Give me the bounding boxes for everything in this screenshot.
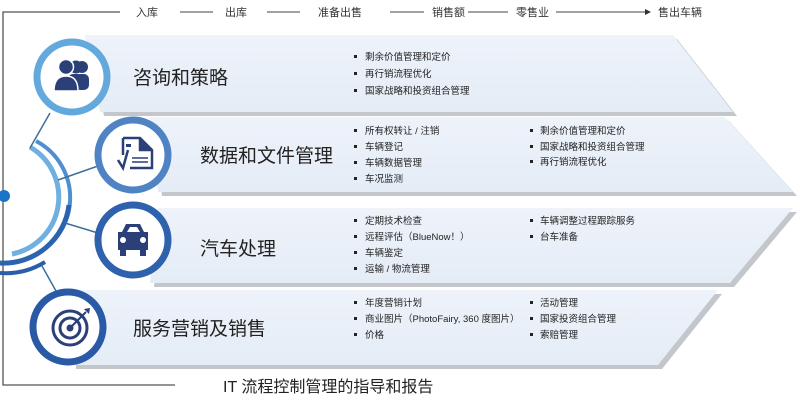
- bullets band 4: [354, 297, 617, 341]
- bullets band 2: 车辆数据管理: [365, 157, 423, 169]
- blue dot: [0, 190, 10, 202]
- bullets band 4: 活动管理: [540, 297, 579, 309]
- bullets band 4: 商业图片（PhotoFairy, 360 度图片）: [365, 313, 520, 325]
- bullets band 3: 车辆鉴定: [365, 247, 404, 259]
- bracket frame: [3, 12, 175, 385]
- icon 2: document: [98, 120, 168, 190]
- process timeline: [136, 5, 702, 19]
- band 4: [70, 290, 722, 369]
- icon 4: target: [33, 292, 103, 362]
- bullets band 2: [354, 125, 645, 185]
- bullets band 3: 远程评估（BlueNow！）: [365, 231, 470, 243]
- bullets band 2: 再行销流程优化: [540, 156, 607, 168]
- bullets band 1: 再行销流程优化: [365, 68, 432, 80]
- icon 3: car: [98, 205, 168, 275]
- bullets band 1: 剩余价值管理和定价: [365, 51, 451, 63]
- title 3: 汽车处理: [200, 238, 276, 260]
- bullets band 3: 车辆调整过程跟踪服务: [540, 215, 636, 227]
- bullets band 3: 台车准备: [540, 231, 579, 243]
- process timeline: 入库: [136, 6, 158, 19]
- icon 1: people: [37, 42, 107, 112]
- footer caption: IT 流程控制管理的指导和报告: [223, 378, 433, 396]
- band 2: [150, 117, 797, 196]
- bullets band 3: [354, 215, 636, 275]
- process timeline: 零售业: [516, 5, 549, 19]
- bullets band 4: 年度营销计划: [365, 297, 422, 309]
- band 1: [85, 35, 737, 116]
- title 1: 咨询和策略: [133, 67, 228, 89]
- process timeline: 出库: [225, 5, 247, 19]
- bullets band 4: 价格: [365, 329, 385, 341]
- bullets band 4: 索赔管理: [540, 329, 579, 341]
- bullets band 4: 国家投资组合管理: [540, 313, 617, 325]
- bullets band 1: [354, 51, 470, 97]
- bullets band 3: 运输 / 物流管理: [365, 263, 430, 275]
- title 2: 数据和文件管理: [200, 145, 333, 167]
- bullets band 2: 国家战略和投资组合管理: [540, 141, 645, 153]
- central arcs: [0, 113, 98, 291]
- process timeline: 销售额: [432, 5, 465, 19]
- band 3: [150, 208, 797, 287]
- process timeline: 准备出售: [318, 5, 362, 19]
- title 4: 服务营销及销售: [133, 318, 266, 340]
- process timeline: 售出车辆: [658, 5, 702, 19]
- bullets band 2: 剩余价值管理和定价: [540, 125, 626, 137]
- bullets band 3: 定期技术检查: [365, 215, 423, 227]
- bullets band 1: 国家战略和投资组合管理: [365, 85, 470, 97]
- bullets band 2: 所有权转让 / 注销: [365, 125, 440, 137]
- bullets band 2: 车况监测: [365, 173, 403, 185]
- bullets band 2: 车辆登记: [365, 141, 404, 153]
